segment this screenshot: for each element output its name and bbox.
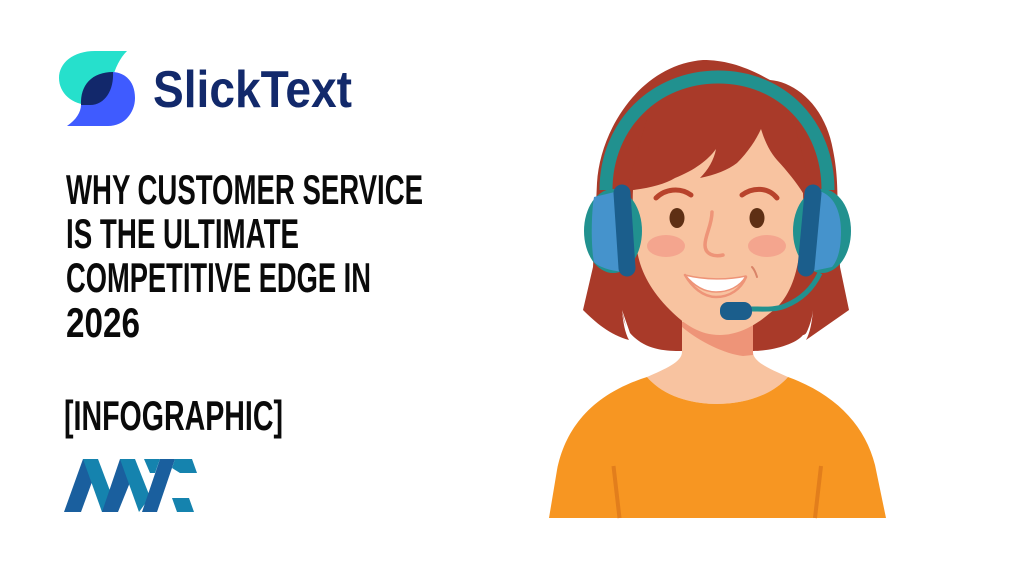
cheeks [647, 235, 786, 257]
logo: SlickText [59, 51, 352, 126]
title [66, 166, 423, 346]
title: 2026 [66, 299, 140, 346]
title: COMPETITIVE EDGE IN [66, 254, 371, 301]
mouth [685, 267, 757, 297]
nose [705, 212, 723, 256]
white hair notches [622, 310, 813, 342]
icon: SlickText S mark [59, 51, 135, 126]
headband [606, 77, 828, 190]
title: IS THE ULTIMATE [66, 210, 299, 257]
bangs [625, 108, 812, 195]
eyes [670, 208, 764, 228]
infographic label: [INFOGRAPHIC] [64, 392, 283, 439]
title: WHY CUSTOMER SERVICE [66, 166, 423, 213]
wordmark: SlickText [153, 61, 352, 119]
eyebrows [656, 189, 777, 198]
face [633, 120, 803, 335]
neck [647, 320, 788, 404]
illustration: support agent with headset [549, 60, 886, 518]
shirt fold lines [614, 466, 821, 518]
logo: MNT mark [64, 459, 197, 512]
left ear cup [584, 189, 642, 273]
hair [583, 60, 849, 351]
shirt [549, 377, 886, 518]
neck shadow [682, 322, 753, 356]
right ear cup [793, 189, 851, 273]
headset microphone [720, 273, 820, 320]
